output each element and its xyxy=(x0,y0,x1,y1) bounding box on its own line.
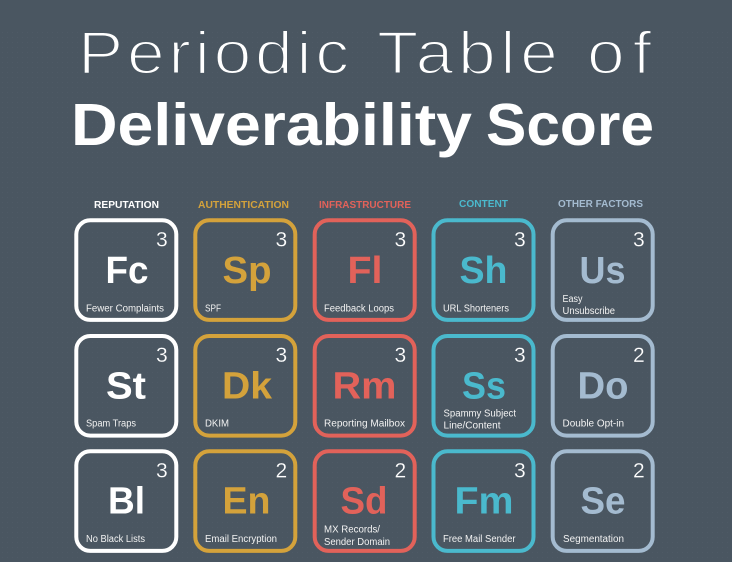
title: Score xyxy=(486,92,654,158)
element: Ss xyxy=(434,336,534,436)
title: Table xyxy=(377,19,558,86)
element: Dk xyxy=(195,336,295,436)
element: Sh: URL Shorteners xyxy=(443,304,509,314)
element: Fc: Fewer Complaints xyxy=(86,304,164,314)
column: content xyxy=(434,198,534,551)
element: Rm: 3 xyxy=(394,344,406,367)
element: Fl: 3 xyxy=(394,228,406,252)
element: Sp xyxy=(195,220,295,320)
element: Sd: Sender Domain xyxy=(324,537,390,548)
column: infrastructure xyxy=(315,199,415,551)
element: Bl: No Black Lists xyxy=(86,534,145,545)
element: Fl xyxy=(315,220,415,320)
element: Dk: Dk xyxy=(222,365,273,407)
element: Sh: Sh xyxy=(460,250,508,292)
element: Ss: Line/Content xyxy=(444,421,501,432)
element: Fc: Fc xyxy=(106,250,148,292)
heading: infrastructure: INFRASTRUCTURE xyxy=(319,199,411,211)
element: Fl: Fl xyxy=(348,250,382,292)
element: En: En xyxy=(222,480,270,522)
element: Fc: 3 xyxy=(156,228,168,252)
element: Sp: Sp xyxy=(222,250,272,292)
element: Sp: 3 xyxy=(276,228,287,252)
element: Se: Se xyxy=(580,480,626,522)
heading: other factors: OTHER FACTORS xyxy=(558,198,643,210)
element: Do: Double Opt-in xyxy=(562,419,624,430)
element: Us: 3 xyxy=(633,228,645,252)
title: of xyxy=(587,19,652,86)
element: Ss: 3 xyxy=(514,344,526,367)
element: Sh xyxy=(434,220,534,320)
column: other factors xyxy=(553,198,653,551)
element: Dk: 3 xyxy=(276,344,287,367)
heading: reputation: REPUTATION xyxy=(94,199,159,211)
title: Periodic xyxy=(78,19,349,86)
element: Fm: Free Mail Sender xyxy=(443,534,516,545)
element: Rm: Reporting Mailbox xyxy=(324,419,405,430)
element: Ss: Ss xyxy=(462,365,506,407)
element: Do: Do xyxy=(578,365,628,407)
element: Sd: Sd xyxy=(340,480,388,522)
element: Se xyxy=(553,451,653,551)
element: Rm: Rm xyxy=(332,365,396,407)
element: Fm: 3 xyxy=(514,460,526,482)
element: En: Email Encryption xyxy=(205,534,277,545)
heading: authentication: AUTHENTICATION xyxy=(198,199,289,211)
element: St: Spam Traps xyxy=(86,419,136,430)
element: Se: 2 xyxy=(633,460,645,482)
element: Dk: DKIM xyxy=(205,419,229,430)
element: Bl: Bl xyxy=(108,480,145,522)
column: reputation xyxy=(76,199,176,551)
element: Sd: 2 xyxy=(394,460,406,482)
element: Us xyxy=(553,220,653,320)
element: Us: Unsubscribe xyxy=(562,306,615,317)
column: authentication xyxy=(195,199,295,551)
element: Do: 2 xyxy=(633,344,645,367)
element: St: 3 xyxy=(156,344,168,367)
title: Deliverability xyxy=(71,92,472,158)
element: Fc xyxy=(76,220,176,320)
element: En: 2 xyxy=(276,460,287,482)
element: Us: Us xyxy=(580,250,626,292)
element: Us: Easy xyxy=(562,294,582,305)
element: Sd xyxy=(315,451,415,551)
element: Sh: 3 xyxy=(514,228,526,252)
element: Bl xyxy=(76,451,176,551)
element: Fl: Feedback Loops xyxy=(324,304,394,314)
element: Sd: MX Records/ xyxy=(324,525,380,536)
element: Rm xyxy=(315,336,415,436)
element: En xyxy=(195,451,295,551)
element: Bl: 3 xyxy=(156,460,168,482)
element: St xyxy=(76,336,176,436)
element: St: St xyxy=(106,365,146,407)
element: Sp: SPF xyxy=(205,304,221,314)
element: Fm: Fm xyxy=(454,480,514,522)
element: Do xyxy=(553,336,653,436)
element: Se: Segmentation xyxy=(563,534,624,545)
title xyxy=(71,19,654,158)
element: Fm xyxy=(434,451,534,551)
heading: content: CONTENT xyxy=(459,198,509,210)
element: Ss: Spammy Subject xyxy=(444,409,516,420)
